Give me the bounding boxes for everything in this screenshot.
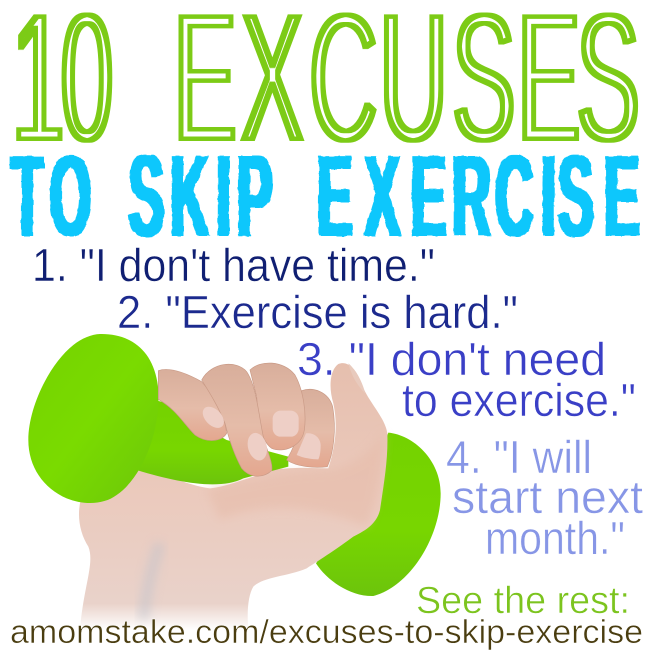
excuse 3 <box>297 333 636 426</box>
excuse 4 line 1: 4. "I will <box>446 431 592 483</box>
excuse 3 line 2: to exercise." <box>402 374 636 426</box>
dumbbell left head <box>28 334 159 503</box>
hand and arm <box>79 363 387 630</box>
dumbbell handle <box>137 400 288 484</box>
fingernails <box>199 403 321 463</box>
dumbbell and hand <box>28 334 441 630</box>
excuse 3 line 1: 3. "I don't need <box>297 333 606 385</box>
wrist vein shading <box>143 543 160 620</box>
excuse 4 <box>446 431 643 564</box>
url: amomstake.com/excuses-to-skip-exercise <box>10 613 643 650</box>
dumbbell right head <box>316 433 441 596</box>
excuse 2: 2. "Exercise is hard." <box>117 286 518 338</box>
finger 1 <box>158 369 227 440</box>
palm shading <box>207 430 383 527</box>
finger 3 <box>250 363 305 450</box>
finger 4 <box>287 389 334 467</box>
excuse 1: 1. "I don't have time." <box>32 239 435 291</box>
excuse 4 line 2: start next <box>452 471 643 523</box>
call to action: See the rest: <box>416 580 630 622</box>
excuse 4 line 3: month." <box>485 512 625 564</box>
thumb nail <box>348 363 365 393</box>
subtitle: to skip exercise: TO SKIP EXERCISE <box>11 132 640 262</box>
finger 2 <box>202 364 272 476</box>
